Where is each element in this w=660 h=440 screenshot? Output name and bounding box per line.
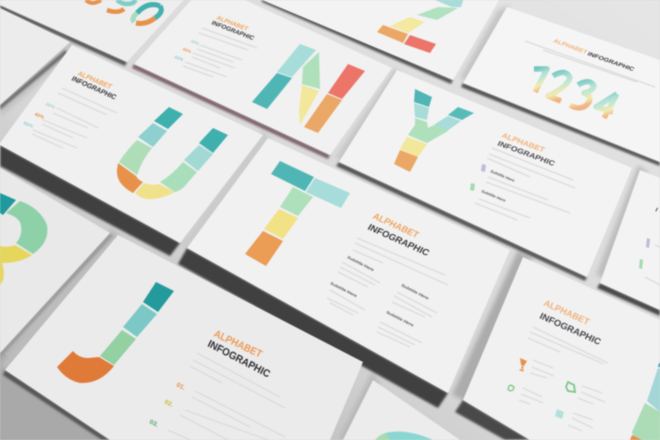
percentage labels: 50%: [22, 121, 35, 130]
slide title: INFOGRAPHIC: [586, 52, 636, 73]
partial letter: [630, 363, 660, 440]
panel: letter J slide: [5, 235, 363, 440]
slide title: ALPHABET: [500, 131, 547, 154]
subtitles: Subtitle Here: [481, 189, 506, 203]
icon: gear: [508, 385, 514, 391]
body text lines: [519, 327, 608, 431]
digit 9 fragment: [107, 0, 136, 12]
numbered labels: 03.: [148, 419, 159, 429]
panel: letter U slide: [0, 45, 263, 243]
percentage labels: [22, 102, 57, 130]
digit 6 fragment: [86, 0, 101, 3]
letter T: [245, 161, 350, 266]
slide title: ALPHABET: [542, 298, 591, 327]
partial letter arc: [375, 432, 433, 440]
percentage labels: 40%: [33, 112, 46, 121]
panel: numbers 1234 slide: [463, 7, 660, 162]
slide title: [206, 328, 272, 380]
slide title: INFOGRAPHIC: [496, 139, 557, 168]
percentage labels: 50%: [173, 55, 185, 62]
digit 0: [133, 5, 161, 23]
subtitles: Subtitle Here: [347, 255, 376, 273]
panel: letter Y slide: [339, 70, 632, 277]
slide title: INFOGRAPHIC: [538, 311, 603, 347]
numbered labels: 02.: [163, 399, 174, 409]
letter Z: [377, 0, 464, 53]
letter N: [252, 44, 365, 133]
numbered labels: [148, 382, 186, 429]
slide title: INFOGRAPHIC: [366, 222, 431, 258]
slide title: ALPHABET: [371, 211, 421, 240]
panel: letter T slide: [187, 138, 510, 393]
body text lines: [32, 88, 117, 148]
title fragment: I: [654, 208, 659, 214]
slide title: INFOGRAPHIC: [206, 338, 272, 380]
percentage labels: 40%: [181, 47, 193, 54]
subtitles: Subtitle Here: [386, 310, 416, 328]
slide title: [496, 131, 557, 168]
percentage labels: 30%: [189, 39, 201, 46]
percentage labels: [173, 39, 201, 62]
letter J: [57, 282, 174, 383]
digits 1234: [534, 69, 617, 118]
body text lines: [183, 28, 257, 77]
subtitles: Subtitle Here: [401, 283, 431, 301]
letter U: [117, 107, 228, 199]
subtitles: Subtitle Here: [490, 169, 515, 183]
body text lines: [327, 238, 448, 347]
slide title: ALPHABET: [212, 328, 264, 361]
list markers: [470, 164, 486, 191]
letter R: [0, 193, 47, 285]
subtitles: [481, 169, 515, 203]
numbered labels: 01.: [175, 382, 186, 392]
icon: document: [555, 409, 564, 419]
slide title: ALPHABET: [76, 69, 114, 91]
panel: digits slide 690: [0, 0, 193, 62]
panel: top-left blank slide: [0, 8, 70, 105]
slide title: ALPHABET: [215, 15, 249, 33]
slide title: [552, 39, 636, 73]
icon: chart: [566, 382, 575, 392]
icon: trophy: [520, 358, 527, 372]
panel: letter R slide: [0, 168, 110, 353]
percentage labels: 30%: [44, 102, 57, 111]
panel: letter N slide: [134, 0, 392, 155]
slide title: INFOGRAPHIC: [210, 20, 256, 42]
panel: letter Z slide: [250, 0, 505, 80]
body text lines: [475, 148, 575, 220]
subtitles: Subtitle Here: [330, 281, 359, 299]
panel: bottom slide with partial letter: [343, 380, 460, 440]
slide title: INFOGRAPHIC: [70, 74, 119, 102]
subtitles: [330, 255, 431, 328]
letter Y: [394, 89, 474, 172]
slide title: ALPHABET: [552, 39, 588, 56]
panel: icons slide: [463, 257, 660, 440]
list markers: [639, 238, 650, 269]
body text lines: [168, 353, 285, 440]
panel: far-right slide: [600, 170, 660, 310]
